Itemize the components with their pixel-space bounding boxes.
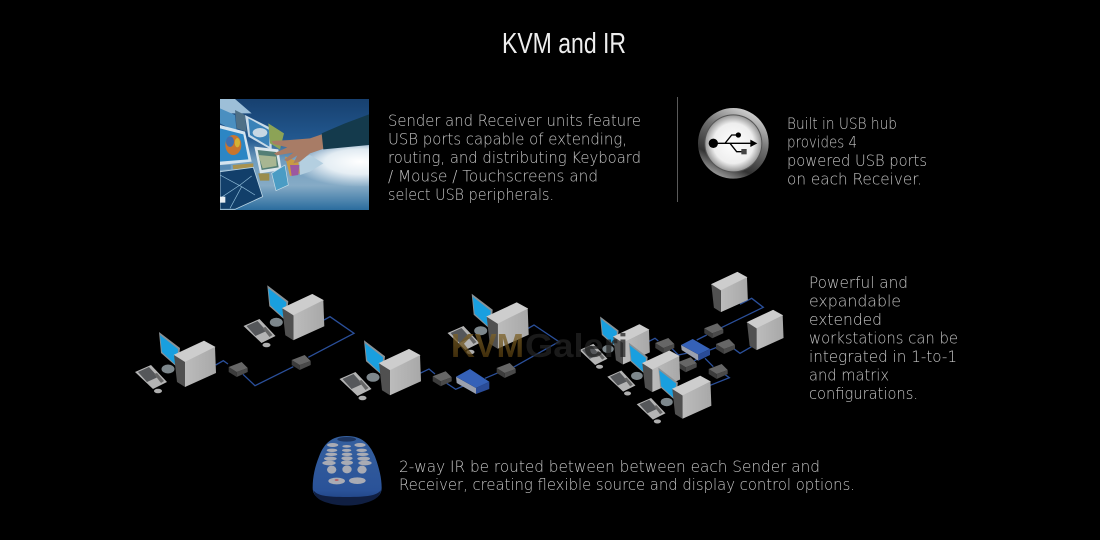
text: built in USB hub: on each Receiver. xyxy=(787,170,922,188)
text: built in USB hub: powered USB ports xyxy=(787,151,927,170)
watermark: KVM xyxy=(451,327,524,364)
hand and sleeve xyxy=(272,114,369,163)
watermark xyxy=(451,327,628,364)
text: expandable workstations: configurations. xyxy=(809,384,918,403)
diagram: one-to-one extension xyxy=(135,285,354,393)
text: built in USB hub: provides 4 xyxy=(787,132,857,152)
text: 2-way IR: Receiver, creating flexible source and display control options. xyxy=(399,475,855,494)
text: sender and receiver USB: Sender and Receiver units feature xyxy=(388,111,641,130)
icon: IR remote control xyxy=(313,436,382,505)
text: expandable workstations: integrated in 1-to-1 xyxy=(809,347,957,366)
text: expandable workstations xyxy=(809,273,958,403)
text: sender and receiver USB: USB ports capable of extending, xyxy=(388,130,627,148)
text: expandable workstations: extended xyxy=(809,310,882,329)
image: hand touching floating screens xyxy=(220,99,369,210)
divider xyxy=(677,97,678,202)
text: sender and receiver USB: routing, and distributing Keyboard xyxy=(388,148,641,167)
blue switch xyxy=(681,339,710,361)
text: built in USB hub: Built in USB hub xyxy=(787,114,897,133)
text: sender and receiver USB xyxy=(388,111,641,204)
text: 2-way IR xyxy=(399,457,855,494)
text: expandable workstations: and matrix xyxy=(809,366,889,384)
blue switch xyxy=(456,369,489,394)
text: sender and receiver USB: select USB peripherals. xyxy=(388,185,554,204)
text: 2-way IR: 2-way IR be routed between between each Sender and xyxy=(399,457,820,476)
watermark: Galeri xyxy=(525,327,628,364)
title: KVM and IR xyxy=(502,28,626,60)
text: expandable workstations: workstations can be xyxy=(809,328,958,348)
text: expandable workstations: expandable xyxy=(809,292,901,310)
diagram: extension through switch xyxy=(340,294,559,400)
text: expandable workstations: Powerful and xyxy=(809,273,908,292)
text: built in USB hub xyxy=(787,114,927,188)
diagram: matrix configuration xyxy=(579,272,784,423)
icon: USB xyxy=(698,108,769,179)
text: sender and receiver USB: / Mouse / Touchscreens and xyxy=(388,166,598,186)
